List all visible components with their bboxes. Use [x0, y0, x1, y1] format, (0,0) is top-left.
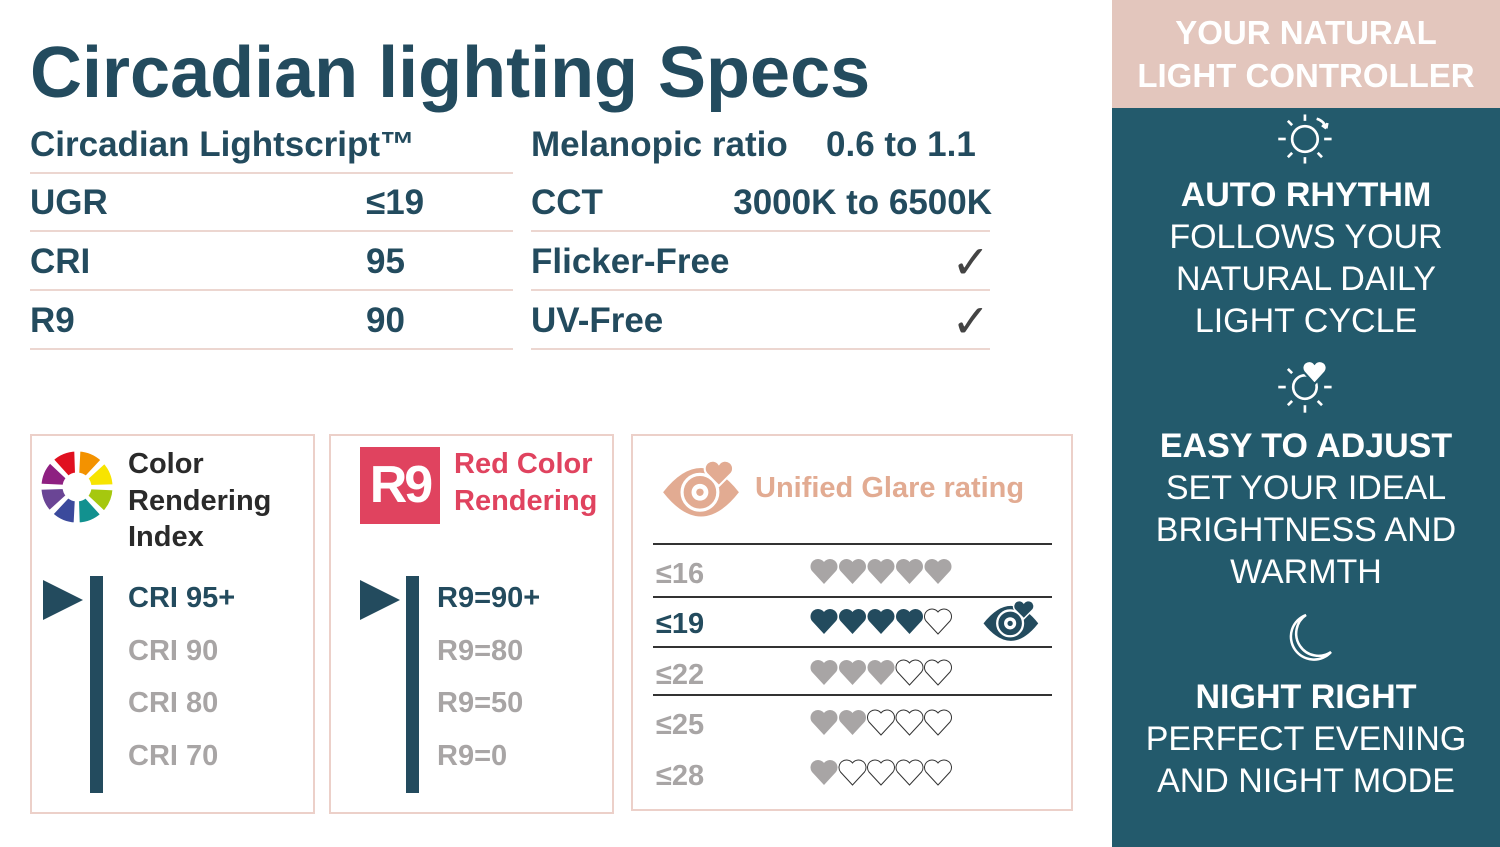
- UGR table: ≤19: [656, 608, 704, 640]
- row: flicker: Flicker-Free: [531, 242, 729, 281]
- spec table left: [30, 125, 513, 350]
- heading: R9: Rendering: [454, 484, 597, 516]
- feature: night right: AND NIGHT MODE: [1157, 762, 1455, 800]
- feature: easy to adjust: SET YOUR IDEAL: [1166, 469, 1446, 507]
- feature: night right: NIGHT RIGHT: [1196, 678, 1416, 716]
- heading: CRI: Rendering: [128, 484, 271, 516]
- UGR table: ≤25: [656, 709, 704, 741]
- R9 values: R9=50: [437, 687, 523, 719]
- row: flicker: [531, 233, 990, 291]
- heading: R9: Red Color: [454, 448, 593, 480]
- title: Circadian lighting Specs: [30, 33, 870, 113]
- icon: eye heart: [663, 462, 739, 516]
- heading: UGR: Unified Glare rating: [755, 472, 1024, 504]
- arrow marker: [43, 580, 83, 620]
- icon: sun: [1278, 114, 1332, 164]
- spec table right: [531, 125, 992, 350]
- R9 values: R9=80: [437, 634, 523, 666]
- row: UGR: [30, 174, 513, 232]
- feature: easy to adjust: EASY TO ADJUST: [1160, 427, 1452, 465]
- row: CRI: CRI: [30, 242, 90, 281]
- CRI values: CRI 95+: [128, 582, 235, 614]
- feature: auto rhythm: NATURAL DAILY: [1176, 260, 1436, 298]
- arrow marker: [360, 580, 400, 620]
- R9 values: R9=0: [437, 740, 507, 772]
- heading: R9: [454, 448, 597, 516]
- icon: sun heart: [1278, 362, 1332, 413]
- UGR table: ≤16: [656, 558, 704, 590]
- feature: easy to adjust: BRIGHTNESS AND: [1156, 511, 1456, 549]
- CRI values: CRI 70: [128, 740, 218, 772]
- feature: auto rhythm: LIGHT CYCLE: [1195, 302, 1417, 340]
- row: melanopic: Melanopic ratio: [531, 125, 788, 164]
- row: R9: R9: [30, 301, 75, 340]
- row: UV: [531, 292, 990, 350]
- row: UV: ✓: [951, 295, 990, 347]
- UGR table: [653, 543, 1052, 792]
- CRI values: CRI 80: [128, 687, 218, 719]
- row: CCT: CCT: [531, 183, 603, 222]
- row: lightscript: Circadian Lightscript™: [30, 125, 415, 164]
- scale bar: [90, 576, 103, 793]
- icon: R9 badge: [360, 447, 440, 524]
- row: R9: [30, 292, 513, 350]
- R9 values: [437, 582, 540, 772]
- feature: easy to adjust: [1156, 427, 1456, 591]
- panel: R9: [329, 434, 614, 814]
- row: UGR: UGR: [30, 183, 108, 222]
- row: UV: UV-Free: [531, 301, 663, 340]
- feature: night right: [1146, 678, 1466, 800]
- row: CCT: 3000K to 6500K: [733, 183, 992, 222]
- row: lightscript: [30, 116, 513, 174]
- row: UGR: ≤19: [366, 183, 424, 222]
- row: CRI: 95: [366, 242, 405, 281]
- sidebar header: LIGHT CONTROLLER: [1137, 57, 1475, 94]
- CRI values: CRI 90: [128, 634, 218, 666]
- row: CRI: [30, 233, 513, 291]
- heading: CRI: Color: [128, 448, 204, 480]
- UGR table: ≤22: [656, 659, 704, 691]
- row: R9: 90: [366, 301, 405, 340]
- icon: moon: [1290, 614, 1332, 661]
- heading: CRI: [128, 448, 271, 553]
- sidebar header: YOUR NATURAL: [1175, 14, 1437, 51]
- panel: CRI: [30, 434, 315, 814]
- row: melanopic: 0.6 to 1.1: [826, 125, 976, 164]
- feature: auto rhythm: [1169, 176, 1443, 340]
- row: flicker: ✓: [951, 236, 990, 288]
- sidebar: [1112, 0, 1500, 847]
- CRI values: [128, 582, 235, 772]
- icon: color wheel: [41, 452, 114, 522]
- row: melanopic: [531, 125, 976, 164]
- sidebar header: [1112, 0, 1500, 108]
- panel: UGR: [631, 434, 1073, 811]
- feature: auto rhythm: FOLLOWS YOUR: [1169, 218, 1443, 256]
- feature: auto rhythm: AUTO RHYTHM: [1181, 176, 1431, 214]
- scale bar: [406, 576, 419, 793]
- UGR table: ≤28: [656, 760, 704, 792]
- icon: R9 badge: R9: [370, 456, 430, 514]
- feature: easy to adjust: WARMTH: [1230, 553, 1382, 591]
- feature: night right: PERFECT EVENING: [1146, 720, 1466, 758]
- R9 values: R9=90+: [437, 582, 540, 614]
- heading: CRI: Index: [128, 521, 204, 553]
- row: CCT: [531, 174, 990, 232]
